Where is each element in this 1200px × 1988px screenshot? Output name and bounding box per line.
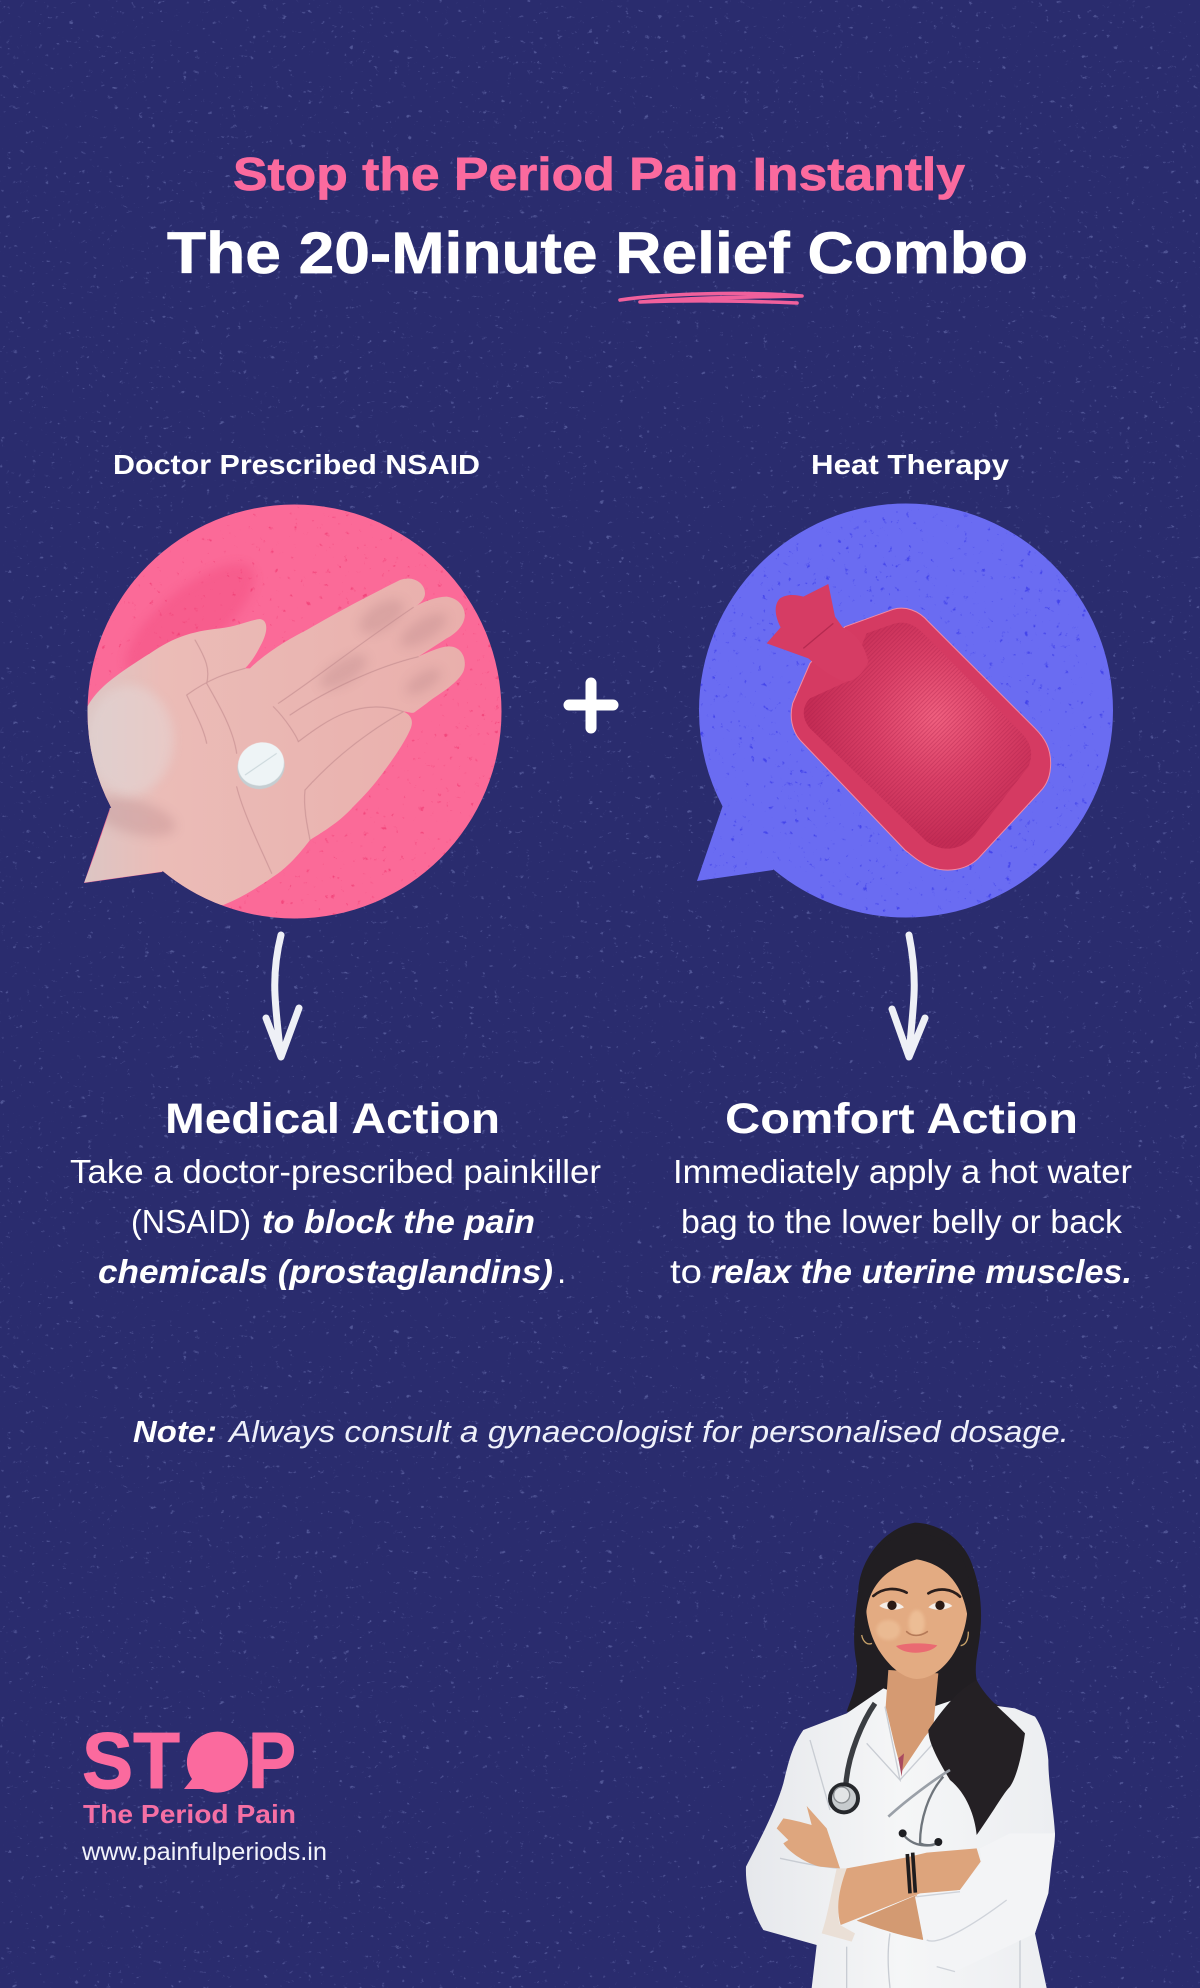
plus sign <box>569 683 613 728</box>
hair top over forehead <box>860 1533 971 1615</box>
body line 3: relax the uterine muscles. <box>711 1253 1132 1290</box>
body line 2: (NSAID) <box>131 1203 251 1240</box>
body line 2 <box>131 1203 535 1240</box>
text block: Comfort Action <box>670 1095 1132 1290</box>
bag body <box>791 608 1051 870</box>
earrings <box>862 1632 968 1646</box>
note: Note: <box>133 1414 217 1449</box>
icon: open hand <box>84 579 465 905</box>
title <box>167 148 1028 303</box>
bag stopper <box>767 584 868 682</box>
panel: blue speech bubble with hot water bag <box>690 495 1125 925</box>
eyebrows <box>873 1589 960 1597</box>
panel: pink speech bubble with hand and pill <box>70 495 515 925</box>
logo: STOP The Period Pain <box>82 1716 296 1829</box>
bracelet <box>907 1853 915 1893</box>
title line: The 20-Minute Relief Combo: The 20-Minute Relief Combo <box>167 221 1028 286</box>
body line 1: Immediately apply a hot water <box>673 1153 1132 1190</box>
body line 2: bag to the lower belly or back <box>681 1203 1123 1240</box>
arrow: left down <box>266 935 299 1057</box>
website url: www.painfulperiods.in <box>81 1838 327 1866</box>
body line 2: to block the pain <box>262 1203 535 1240</box>
label: Heat Therapy: Heat Therapy <box>811 449 1009 480</box>
cuff left <box>822 1868 855 1942</box>
heading: Comfort Action: Comfort Action <box>725 1095 1078 1143</box>
coat <box>746 1688 1055 1988</box>
upper forearm <box>838 1848 981 1925</box>
logo icon: speech bubble O <box>184 1732 248 1793</box>
logo word: P: P <box>248 1716 296 1805</box>
hand under arm <box>777 1806 840 1868</box>
body line 3: chemicals (prostaglandins) <box>98 1253 553 1290</box>
body line 1: Take a doctor-prescribed painkiller <box>70 1153 601 1190</box>
body line 3: to <box>670 1253 702 1290</box>
body line 3: . <box>557 1253 566 1290</box>
lower forearm <box>857 1895 923 1940</box>
text block: Medical Action <box>70 1095 601 1290</box>
neck and chest <box>886 1670 938 1772</box>
logo word: ST: ST <box>82 1716 180 1805</box>
icon: white pill <box>237 742 285 790</box>
label: Doctor Prescribed NSAID: Doctor Prescribed NSAID <box>113 449 480 480</box>
bag ribbed centre <box>804 623 1031 849</box>
coat folds <box>780 1707 1020 1988</box>
eyes <box>879 1601 952 1610</box>
doctor portrait illustration <box>746 1523 1055 1988</box>
underline scribble <box>620 293 802 303</box>
heading: Medical Action: Medical Action <box>165 1095 500 1143</box>
logo tagline: The Period Pain <box>83 1799 296 1829</box>
note: Always consult a gynaecologist for personalised dosage. <box>227 1414 1069 1449</box>
pale heel of hand <box>87 685 173 795</box>
arrow: right down <box>892 935 925 1057</box>
darker finger joints <box>104 600 445 838</box>
arms crossed <box>777 1806 1055 1972</box>
front hair locks <box>928 1680 1025 1835</box>
finger creases <box>187 607 418 873</box>
right sleeve <box>915 1833 1055 1972</box>
stethoscope <box>830 1703 950 1846</box>
lips <box>896 1643 937 1653</box>
nose <box>907 1632 927 1635</box>
title line: Stop the Period Pain Instantly: Stop the Period Pain Instantly <box>233 148 965 200</box>
icon: hot water bag <box>767 584 1051 870</box>
hair back <box>847 1523 1028 1837</box>
face <box>866 1546 968 1679</box>
